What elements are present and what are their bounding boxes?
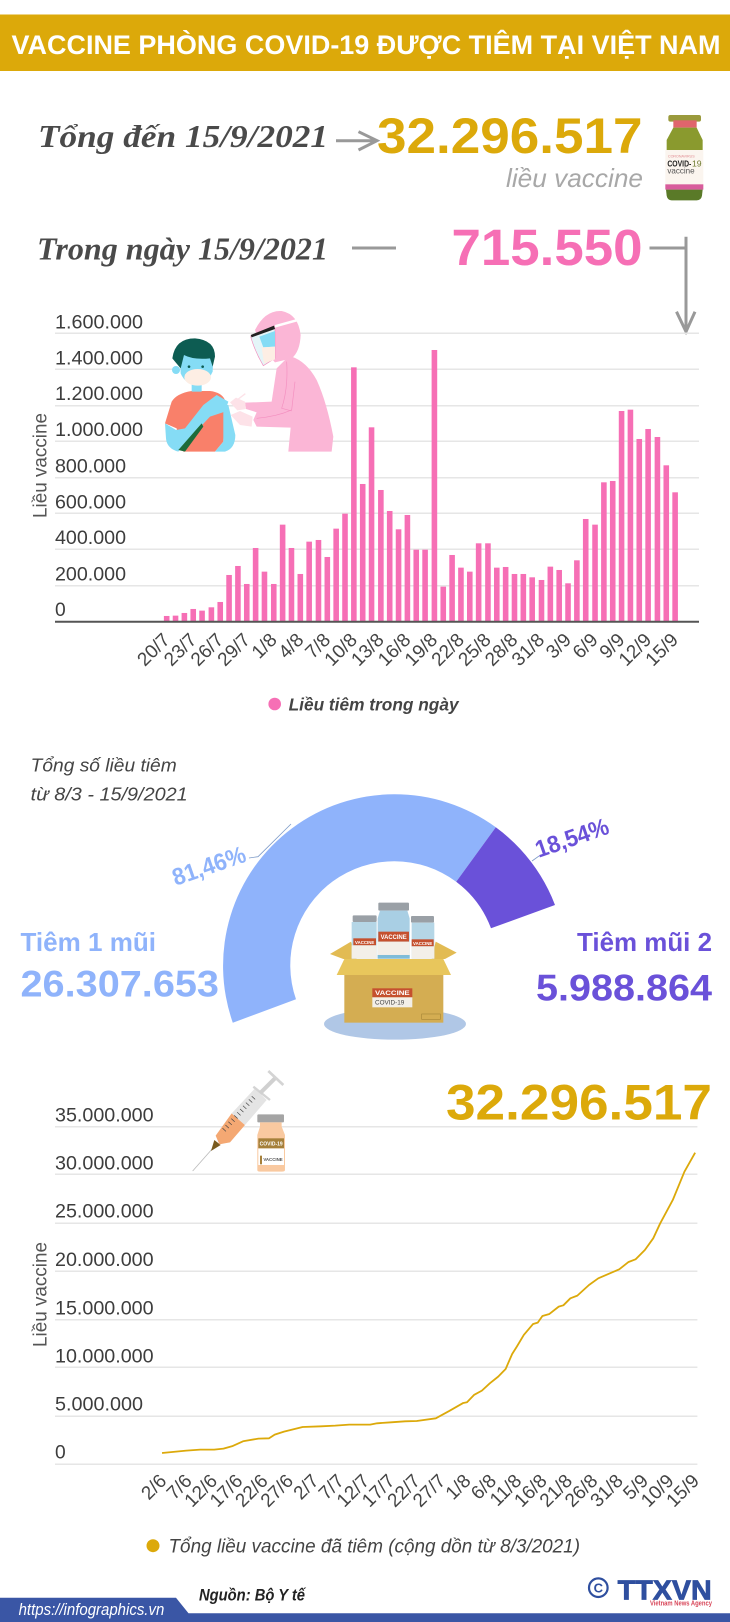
icon: vaccine box: VACCINE [381, 935, 407, 941]
second dose stat: Tiêm mũi 2 [577, 927, 712, 957]
x axis date labels: 3/9 [542, 630, 576, 663]
bars [164, 350, 678, 622]
x axis date labels: 27/6 [257, 1471, 298, 1512]
icon: vaccine vial: 19 [692, 159, 702, 168]
y axis labels [55, 312, 143, 621]
x axis date labels: 9/9 [596, 630, 629, 663]
x axis date labels [138, 1471, 704, 1512]
x axis date labels: 13/8 [348, 630, 389, 671]
y axis labels: 600.000 [55, 492, 126, 513]
label: total to date: Tổng đến 15/9/2021 [38, 118, 328, 154]
title banner: VACCINE PHÒNG COVID-19 ĐƯỢC TIÊM TẠI VIỆT NAM [12, 30, 720, 60]
icon: syringe and vial: COVID-19 [260, 1142, 283, 1148]
x axis line [55, 621, 699, 623]
x axis date labels: 31/8 [587, 1471, 628, 1512]
grid lines [55, 333, 699, 586]
panel: doses split by first and second shot [20, 756, 712, 1040]
source note: Nguồn: Bộ Y tế [199, 1586, 306, 1605]
legend: daily doses: Liều tiêm trong ngày [289, 695, 460, 715]
label: daily date: Trong ngày 15/9/2021 [37, 230, 328, 266]
x axis date labels [134, 630, 683, 671]
y axis labels: 400.000 [55, 528, 126, 549]
x axis date labels: 27/7 [409, 1471, 450, 1512]
y axis title: Liều vaccine [30, 1242, 52, 1347]
x axis date labels: 11/8 [486, 1471, 526, 1511]
second dose stat [536, 927, 712, 1009]
footer bar with website: https://infographics.vn [19, 1600, 164, 1619]
x axis date labels: 22/8 [428, 630, 469, 671]
y axis labels: 1.200.000 [55, 384, 143, 405]
bar chart: daily doses [30, 312, 699, 715]
cumulative total number: 32.296.517 [446, 1074, 712, 1130]
logo: TTXVN [589, 1574, 713, 1608]
icon: vaccine vial: vaccine [667, 166, 695, 176]
text: period of doses [31, 756, 188, 805]
x axis date labels: 5/9 [619, 1471, 653, 1504]
panel: daily doses [37, 219, 695, 332]
y axis labels: 1.400.000 [55, 348, 143, 370]
icon: vaccine vial: CORONAVIRUS [668, 154, 695, 159]
icon: vaccine box: VACCINE [413, 941, 432, 946]
x axis date labels: 15/9 [642, 630, 683, 671]
daily doses number: 715.550 [452, 219, 642, 276]
share label: second dose: 18,54% [532, 813, 612, 864]
y axis labels: 15.000.000 [55, 1299, 154, 1320]
panel: cumulative total [38, 108, 703, 200]
x axis date labels: 22/7 [384, 1471, 425, 1512]
x axis date labels: 23/7 [160, 630, 201, 671]
icon: vaccine vial: COVID- [667, 158, 691, 168]
y axis labels: 0 [55, 600, 66, 621]
icon: vaccine box: COVID-19 [375, 1001, 405, 1007]
y axis labels [55, 1106, 154, 1464]
leader lines [249, 824, 539, 861]
y axis labels: 200.000 [55, 565, 126, 586]
x axis date labels: 17/6 [206, 1471, 247, 1512]
y axis labels: 30.000.000 [55, 1153, 154, 1174]
grid lines [55, 1127, 697, 1464]
y axis labels: 1.600.000 [55, 312, 143, 334]
x axis date labels: 7/8 [302, 630, 335, 663]
icon: syringe and vial: VACCINE [263, 1157, 283, 1163]
second dose stat: 5.988.864 [536, 968, 712, 1009]
x axis date labels: 17/7 [358, 1471, 399, 1512]
x axis date labels: 12/9 [615, 630, 656, 671]
logo: TTXVN: Vietnam News Agency [650, 1598, 713, 1608]
y axis labels: 1.000.000 [55, 420, 143, 441]
x axis date labels: 10/9 [637, 1471, 678, 1512]
first dose stat [20, 927, 219, 1005]
share label: first dose: 81,46% [169, 841, 249, 892]
gauge chart [169, 794, 612, 1023]
legend: cumulative doses: Tổng liều vaccine đã tiêm (cộng dồn từ 8/3/2021) [168, 1536, 580, 1557]
first dose stat: 26.307.653 [20, 964, 219, 1005]
x axis date labels: 21/8 [536, 1471, 577, 1512]
x axis date labels: 1/8 [248, 630, 282, 663]
logo: TTXVN: C [594, 1580, 604, 1596]
icon: vaccine box: VACCINE [355, 940, 374, 945]
x axis date labels: 16/8 [511, 1471, 552, 1512]
y axis labels: 35.000.000 [55, 1106, 154, 1127]
gauge segment: second dose [456, 827, 555, 928]
x axis date labels: 28/8 [481, 630, 522, 671]
x axis date labels: 1/8 [442, 1471, 475, 1504]
x axis date labels: 4/8 [275, 630, 308, 663]
icon: vaccine box: VACCINE [375, 990, 410, 997]
x axis date labels: 19/8 [401, 630, 442, 671]
arrow: to total [336, 132, 377, 150]
y axis labels: 25.000.000 [55, 1202, 154, 1223]
x axis date labels: 15/9 [663, 1471, 704, 1512]
x axis date labels: 29/7 [214, 630, 255, 671]
x axis date labels: 6/8 [467, 1471, 501, 1504]
nurse [230, 311, 333, 452]
icon: syringe and vial [193, 1071, 285, 1172]
x axis date labels: 20/7 [134, 630, 175, 671]
x axis date labels: 2/6 [138, 1471, 171, 1504]
y axis title: Liều vaccine [30, 413, 52, 518]
y axis labels: 800.000 [55, 457, 126, 478]
footer bar with website [0, 1598, 730, 1622]
icon: health worker vaccinating a boy [165, 311, 333, 452]
line chart: cumulative doses [30, 1074, 712, 1557]
x axis date labels: 31/8 [508, 630, 549, 671]
icon: vaccine vial [665, 115, 703, 200]
gauge segment: first dose [223, 794, 496, 1023]
connector dash [352, 246, 396, 250]
x axis date labels: 26/8 [561, 1471, 602, 1512]
x axis date labels: 10/8 [321, 630, 362, 671]
boy [165, 338, 235, 452]
first dose stat: Tiêm 1 mũi [20, 927, 156, 957]
x axis date labels: 16/8 [374, 630, 415, 671]
y axis labels: 10.000.000 [55, 1346, 154, 1367]
text: period of doses: Tổng số liều tiêm [31, 756, 177, 776]
y axis labels: 0 [55, 1443, 66, 1464]
x axis date labels: 7/6 [163, 1471, 197, 1504]
y axis labels: 20.000.000 [55, 1250, 154, 1271]
x axis date labels: 26/7 [187, 630, 228, 671]
title banner [0, 14, 730, 71]
y axis labels: 5.000.000 [55, 1395, 143, 1416]
x axis date labels: 7/7 [315, 1471, 349, 1504]
icon: vaccine box [324, 903, 466, 1040]
unit label: liều vaccine [506, 163, 643, 193]
cumulative line [162, 1153, 695, 1453]
x axis date labels: 25/8 [455, 630, 496, 671]
x axis date labels: 12/6 [181, 1471, 222, 1512]
text: period of doses: từ 8/3 - 15/9/2021 [31, 785, 188, 805]
logo: TTXVN: TTXVN [618, 1574, 712, 1605]
x axis date labels: 6/9 [569, 630, 603, 663]
x axis date labels: 22/6 [232, 1471, 273, 1512]
x axis date labels: 12/7 [333, 1471, 374, 1512]
arrow: down to chart [650, 237, 695, 332]
total doses number: 32.296.517 [377, 108, 642, 164]
x axis date labels: 2/7 [290, 1471, 323, 1504]
